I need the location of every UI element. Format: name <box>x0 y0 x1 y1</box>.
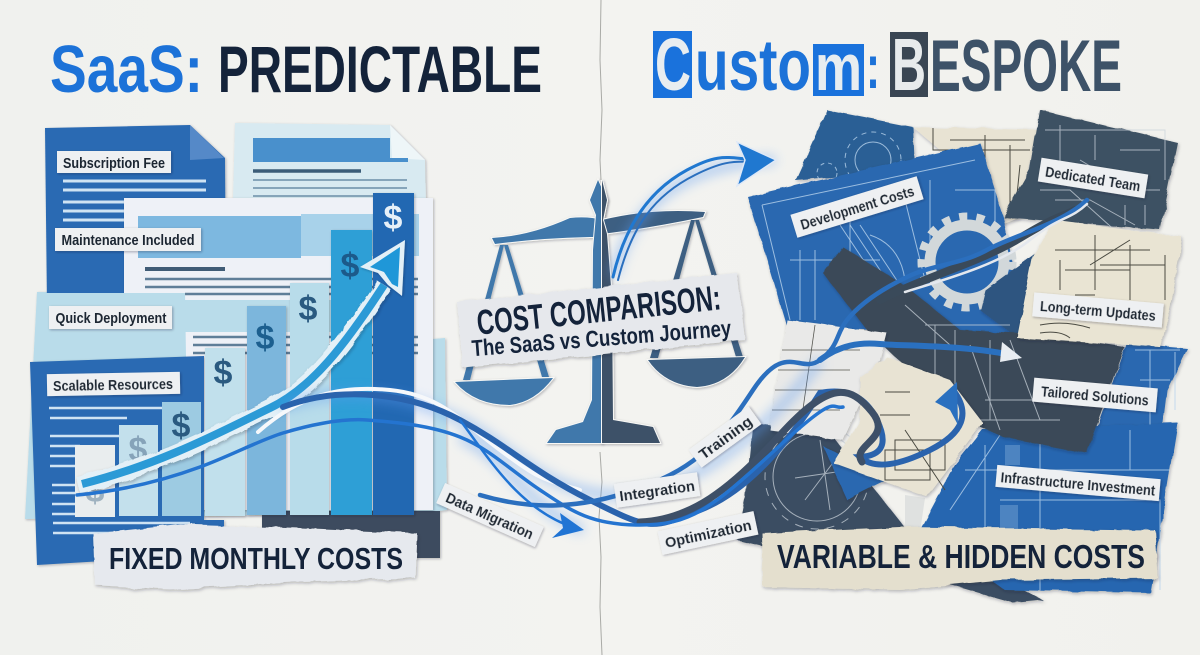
bar 3: $ <box>172 407 191 445</box>
scrap: large blue blueprint <box>748 143 1020 333</box>
scale: left arm and pan <box>455 180 607 443</box>
ribbon: arrow strand across notes <box>820 343 1015 360</box>
bar 4 <box>205 348 245 516</box>
scrap: crumpled cream notes <box>833 357 983 497</box>
bar 8: $ <box>384 199 403 237</box>
label: training <box>689 406 761 468</box>
label: maintenance included <box>55 228 201 251</box>
arrow: rising growth arrow <box>78 240 405 485</box>
title: Custom bespoke <box>653 23 1122 107</box>
document: dark base strip <box>262 511 440 558</box>
arrow: blue flow glow halo <box>283 160 820 530</box>
label: dedicated team: Dedicated Team <box>1044 164 1142 195</box>
document: quick deployment sheet <box>38 293 186 362</box>
document: subscription sheet <box>45 125 226 305</box>
label: optimization: Optimization <box>664 517 753 552</box>
arrowhead: curl on notes <box>935 382 958 425</box>
ribbon: lower thread strand <box>77 406 843 525</box>
label: training: Training <box>696 413 756 463</box>
bar 3 <box>162 402 201 516</box>
document: top right light sheet <box>233 123 426 205</box>
label: integration: Integration <box>618 478 696 505</box>
ribbon: training strand to top right <box>480 200 1087 505</box>
scrap: top blue gear <box>795 110 915 188</box>
scrap: small blue tear <box>822 445 887 500</box>
scrap: right lower blue <box>1093 343 1187 447</box>
title: Custom bespoke: : <box>866 33 880 102</box>
label: subscription fee <box>57 151 171 173</box>
label: tailored solutions: Tailored Solutions <box>1040 383 1149 410</box>
scrap: bottom blue blueprint <box>920 423 1178 593</box>
label: data migration: Data Migration <box>443 489 536 543</box>
label: development costs: Development Costs <box>799 183 916 234</box>
label: cost comparison title: COST COMPARISON: <box>475 278 723 343</box>
scale: right arm and pan <box>602 180 745 443</box>
bar 4: $ <box>214 354 233 392</box>
bar 6 <box>290 283 329 515</box>
ribbon: dark strip toward top right <box>880 210 1075 300</box>
label: scalable resources: Scalable Resources <box>53 376 173 395</box>
illustration: balance scale <box>455 180 745 443</box>
panel: SaaS documents and bar chart <box>25 123 447 590</box>
bar 1 <box>75 445 115 517</box>
bar 8 <box>373 193 414 515</box>
sheet: scalable resources <box>30 356 224 565</box>
bar chart: rising dollar bars <box>30 193 414 565</box>
bar 2 <box>119 425 158 516</box>
title: SaaS predictable: SaaS: <box>50 32 203 107</box>
title: SaaS predictable <box>50 32 542 107</box>
bar 7: $ <box>341 247 360 285</box>
bar 6: $ <box>299 290 318 328</box>
label: infrastructure investment: Infrastructure Investment <box>1000 469 1156 500</box>
label: quick deployment <box>49 306 172 329</box>
scrap: upper right cream <box>1017 220 1182 347</box>
bar 1: $ <box>86 472 105 510</box>
banner: variable and hidden costs <box>762 527 1158 590</box>
title: Custom bespoke: C <box>655 23 691 106</box>
ribbon: dark blue top strand <box>283 390 962 524</box>
title: SaaS predictable: PREDICTABLE <box>218 32 542 106</box>
ribbon: data migration string with arrowhead <box>460 420 575 528</box>
scrap: top cream plan <box>913 127 1037 240</box>
label: long-term updates: Long-term Updates <box>1039 298 1156 325</box>
label: maintenance included: Maintenance Included <box>62 232 194 249</box>
document: large white sheet <box>124 198 433 510</box>
bar 5: $ <box>256 319 275 357</box>
label: quick deployment: Quick Deployment <box>56 310 166 327</box>
scrap: dark blue wedge <box>980 250 1040 338</box>
title: Custom bespoke: usto <box>695 26 811 106</box>
ribbon: white torn edge <box>258 389 580 490</box>
scrap: white tear under notes <box>905 495 925 532</box>
document: back light sheet <box>25 292 447 519</box>
arrow: flowing ribbons between sides <box>77 142 1087 538</box>
title: Custom bespoke: m <box>815 30 862 104</box>
ribbon: white tear to top right <box>905 204 1087 292</box>
panel: custom torn blueprint collage <box>737 110 1187 603</box>
bar 5 <box>247 306 286 515</box>
title: Custom bespoke: B <box>892 23 926 106</box>
label: subscription fee: Subscription Fee <box>63 155 165 172</box>
label: cost comparison title: The SaaS vs Custom Journey <box>471 315 732 361</box>
label: cost comparison title <box>457 273 745 368</box>
bar 2: $ <box>129 431 148 469</box>
scrap: bottom dark gear <box>737 423 1043 603</box>
banner: fixed monthly costs <box>93 524 417 590</box>
bar 7 <box>331 230 372 515</box>
gear: large pale gear <box>922 217 1012 307</box>
scrap: central dark plan <box>823 247 1125 453</box>
ribbon: dark grey strand <box>640 392 878 522</box>
scrap: white calculations <box>770 320 887 440</box>
arrow: rising top arrow <box>613 142 776 280</box>
scrap: top dark circuit <box>1003 110 1178 235</box>
banner: fixed monthly costs: FIXED MONTHLY COSTS <box>109 541 403 576</box>
